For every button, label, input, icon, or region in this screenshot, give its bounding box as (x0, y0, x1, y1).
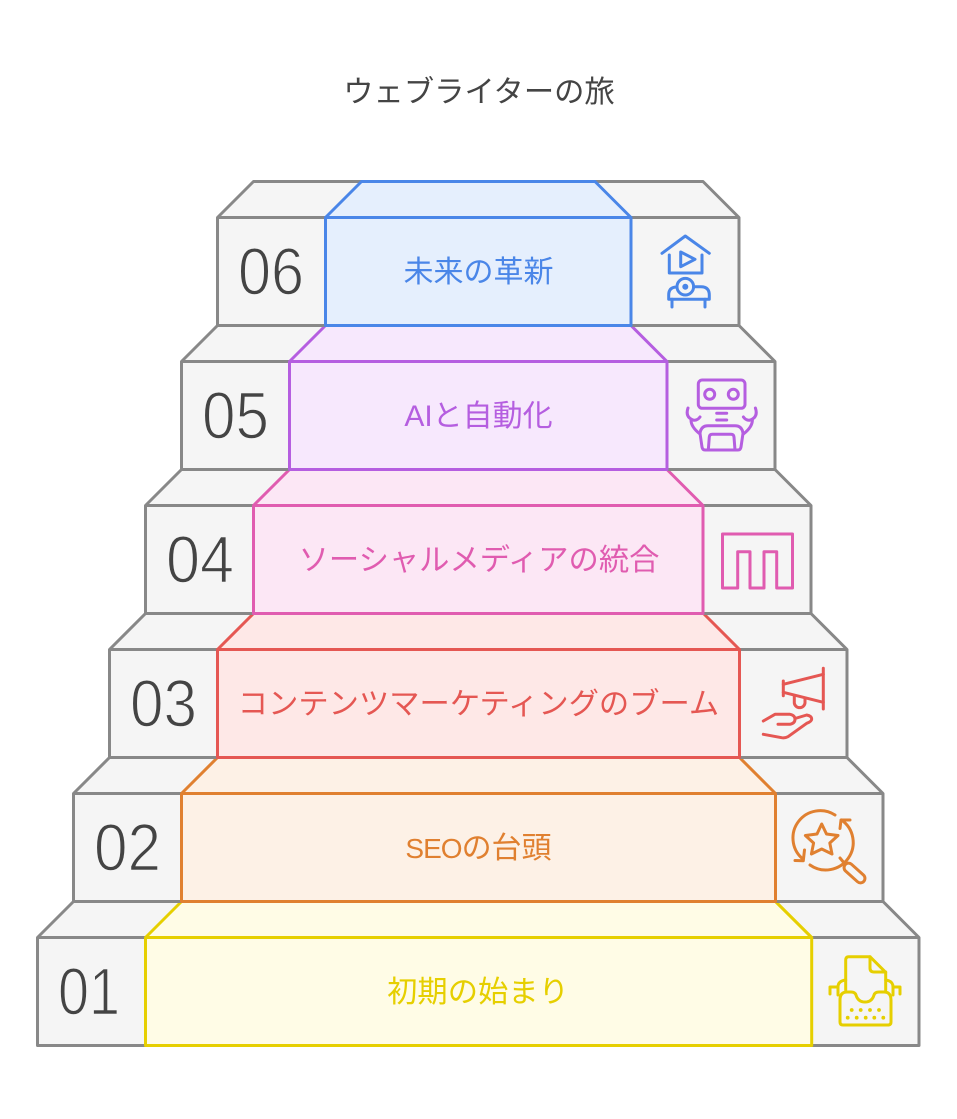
number 04: 04 (166, 522, 234, 598)
number 05: 05 (202, 378, 269, 454)
label 04: ソーシャルメディアの統合 (299, 543, 659, 577)
step 05: AIと自動化 (182, 326, 775, 470)
icon: search star (793, 811, 867, 885)
title: ウェブライターの旅 (343, 75, 615, 109)
label 05: AIと自動化 (404, 400, 553, 433)
icon: megaphone in hand (763, 668, 823, 738)
number 06: 06 (238, 234, 304, 310)
icon: robot (687, 380, 756, 450)
icon: gate pattern (722, 534, 792, 588)
icon: video home (662, 236, 709, 307)
number 01: 01 (58, 954, 120, 1030)
icon: typewriter (830, 957, 900, 1025)
label 06: 未来の革新 (404, 256, 554, 289)
step 03: コンテンツマーケティングのブーム (110, 614, 847, 758)
label 01: 初期の始まり (387, 975, 569, 1009)
step 06: 未来の革新 (218, 182, 739, 326)
label 03: コンテンツマーケティングのブーム (238, 687, 719, 721)
step 01: 初期の始まり (38, 902, 919, 1046)
step 02: SEOの台頭 (74, 758, 883, 902)
number 03: 03 (130, 666, 197, 742)
number 02: 02 (94, 810, 161, 886)
label 02: SEOの台頭 (405, 832, 552, 865)
step 04: ソーシャルメディアの統合 (146, 470, 811, 614)
